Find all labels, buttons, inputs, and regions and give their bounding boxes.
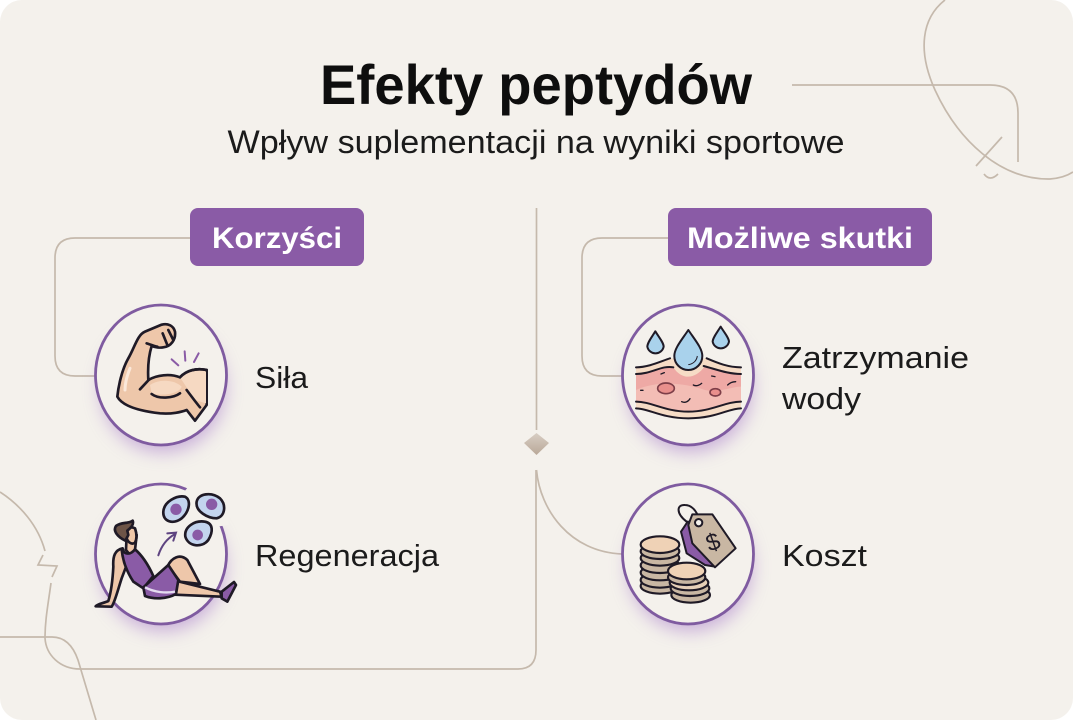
icon: water drops over skin xyxy=(636,327,741,418)
icon: coins and price tag xyxy=(641,505,736,603)
subtitle: Wpływ suplementacji na wyniki sportowe xyxy=(228,124,844,160)
icon: flexed arm xyxy=(117,324,207,421)
side effect: Zatrzymanie wody xyxy=(622,305,969,452)
side effect: Koszt xyxy=(622,484,867,631)
decorative line art: top right xyxy=(792,0,1073,179)
icon: resting athlete and cells xyxy=(96,483,236,607)
decorative line art: bottom left xyxy=(0,470,536,720)
label: Regeneracja xyxy=(255,538,440,573)
connector: right column xyxy=(582,238,668,376)
heading: Korzyści: Korzyści xyxy=(212,222,342,255)
title: Efekty peptydów xyxy=(320,53,752,116)
benefit: Regeneracja xyxy=(96,483,440,631)
label: Koszt xyxy=(782,538,867,573)
icon: coins and price tag: $ xyxy=(702,528,724,557)
heading: Możliwe skutki: Możliwe skutki xyxy=(687,222,913,255)
label: Siła xyxy=(255,360,309,395)
heading: Korzyści xyxy=(190,208,364,266)
central divider with diamond xyxy=(524,208,622,554)
label: Zatrzymanie xyxy=(782,340,969,375)
benefit: Siła xyxy=(96,305,309,452)
heading: Możliwe skutki xyxy=(668,208,932,266)
label line 2: wody xyxy=(781,381,862,416)
connector: left column xyxy=(55,238,190,376)
